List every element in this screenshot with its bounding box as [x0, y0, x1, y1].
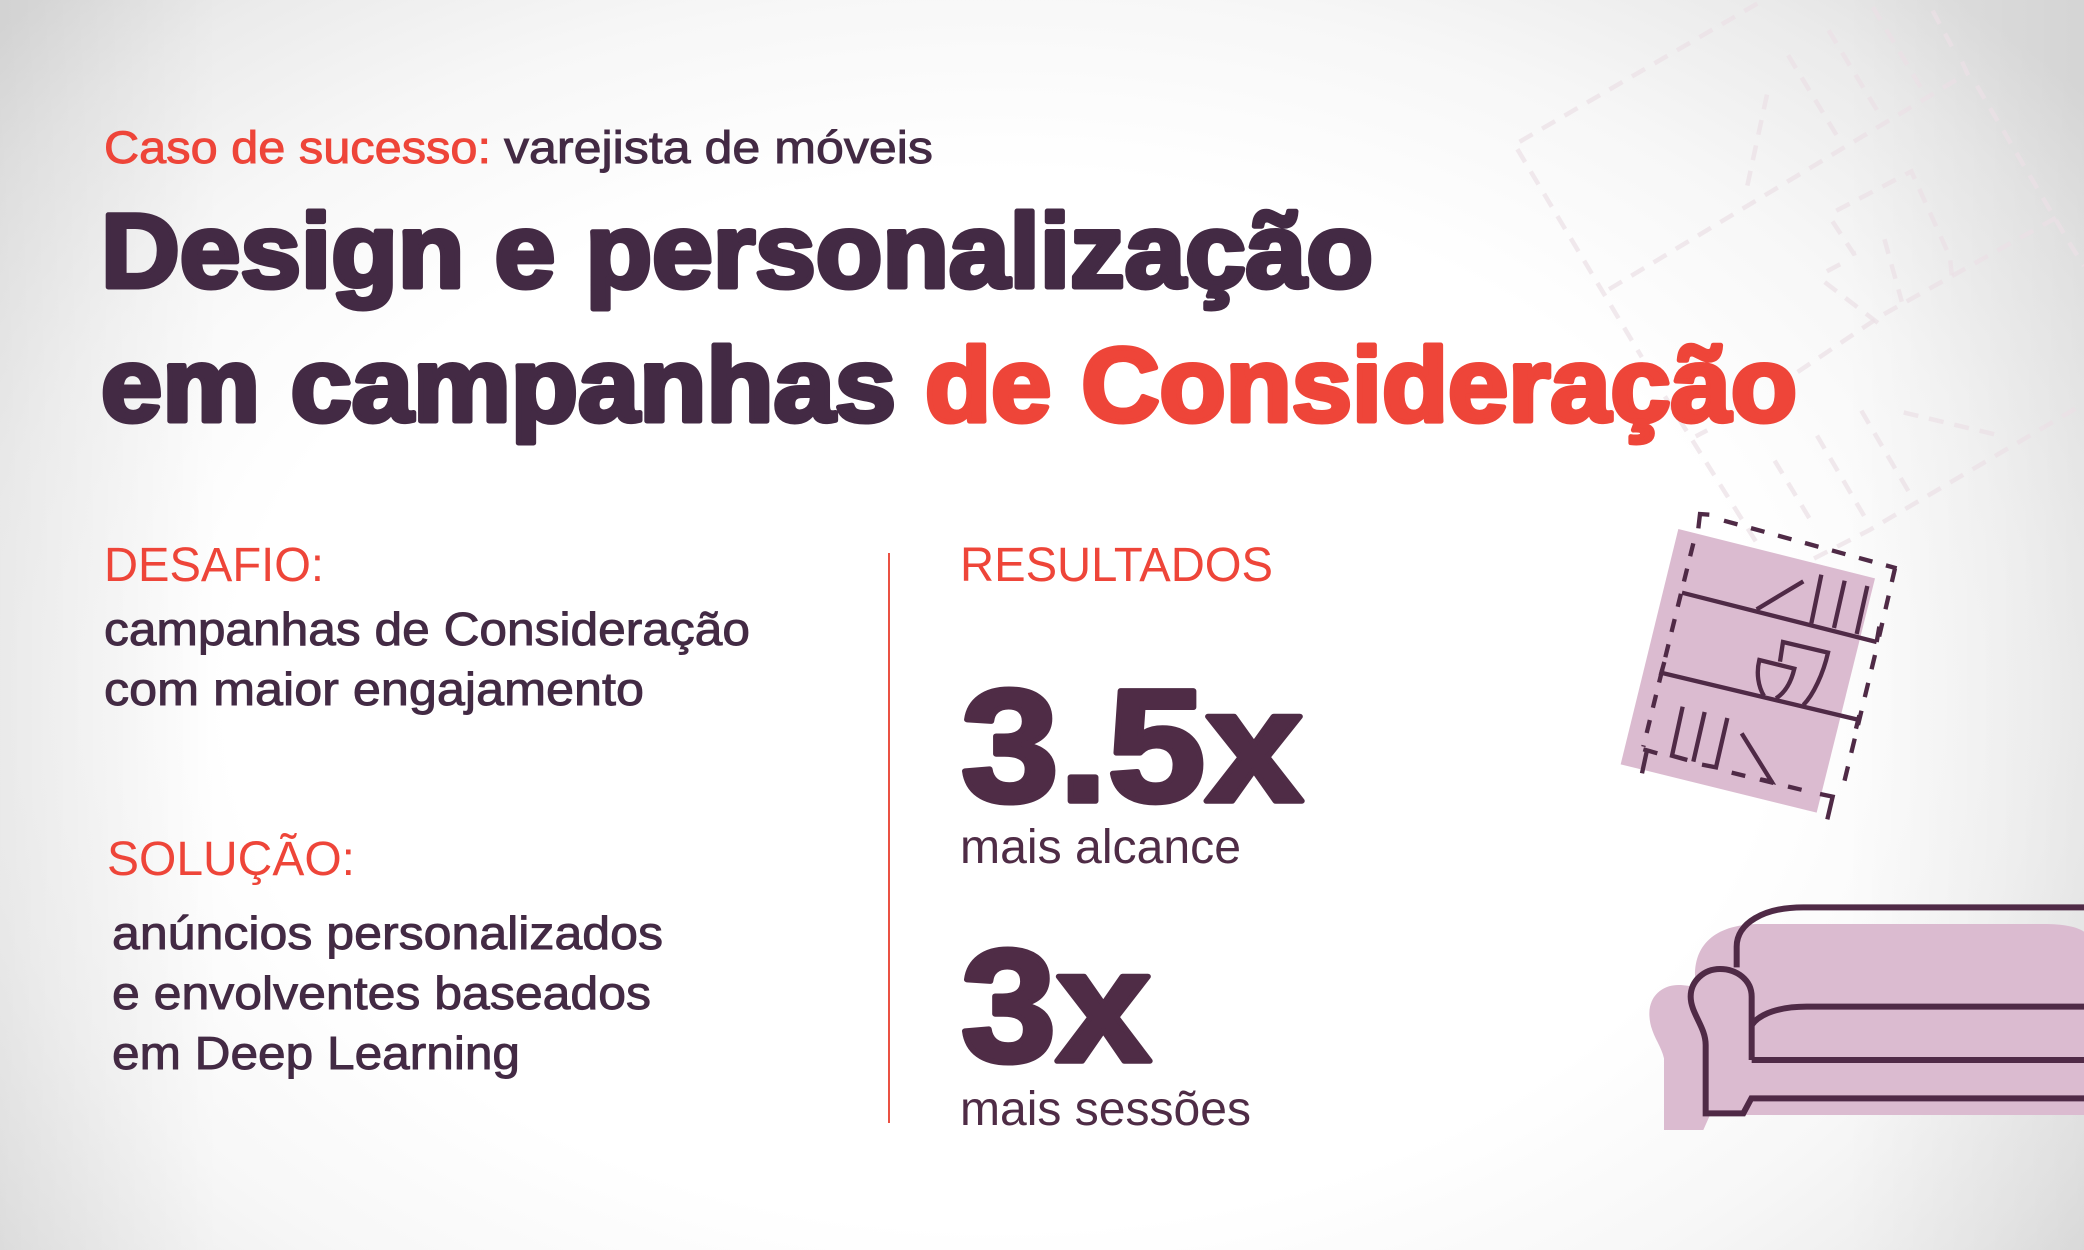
- title: de Consideração: [925, 327, 1797, 444]
- title: em campanhas: [101, 327, 896, 444]
- stat: 3x mais sessões: [960, 916, 1251, 1136]
- text block: desafio: com maior engajamento: [104, 663, 644, 715]
- text block: desafio: [104, 603, 750, 715]
- panel: resultados: [960, 539, 1303, 1136]
- kicker: varejista de móveis: [504, 122, 933, 173]
- panel: desafio: [104, 539, 750, 715]
- heading: solucao: SOLUÇÃO:: [107, 832, 355, 886]
- icon: sofa: [1649, 907, 2084, 1130]
- text block: solucao: e envolventes baseados: [112, 967, 651, 1019]
- stat: 3x mais sessões: 3x: [961, 916, 1151, 1095]
- text block: desafio: campanhas de Consideração: [104, 603, 750, 655]
- text block: solucao: em Deep Learning: [112, 1027, 520, 1079]
- icon: bookshelf: [1621, 514, 1897, 819]
- panel: solucao: [107, 832, 663, 1079]
- stat: 3.5x mais alcance: 3.5x: [961, 656, 1303, 835]
- text block: solucao: [112, 907, 663, 1079]
- divider: [888, 553, 890, 1123]
- heading: desafio: DESAFIO:: [104, 539, 324, 592]
- kicker: Caso de sucesso:: [104, 122, 491, 173]
- text block: solucao: anúncios personalizados: [112, 907, 663, 959]
- kicker: [104, 122, 933, 173]
- stat: 3x mais sessões: mais sessões: [960, 1083, 1251, 1136]
- title: [101, 193, 1797, 444]
- heading: resultados: RESULTADOS: [960, 539, 1273, 592]
- title: Design e personalização: [101, 193, 1373, 310]
- stat: 3.5x mais alcance: mais alcance: [960, 821, 1241, 874]
